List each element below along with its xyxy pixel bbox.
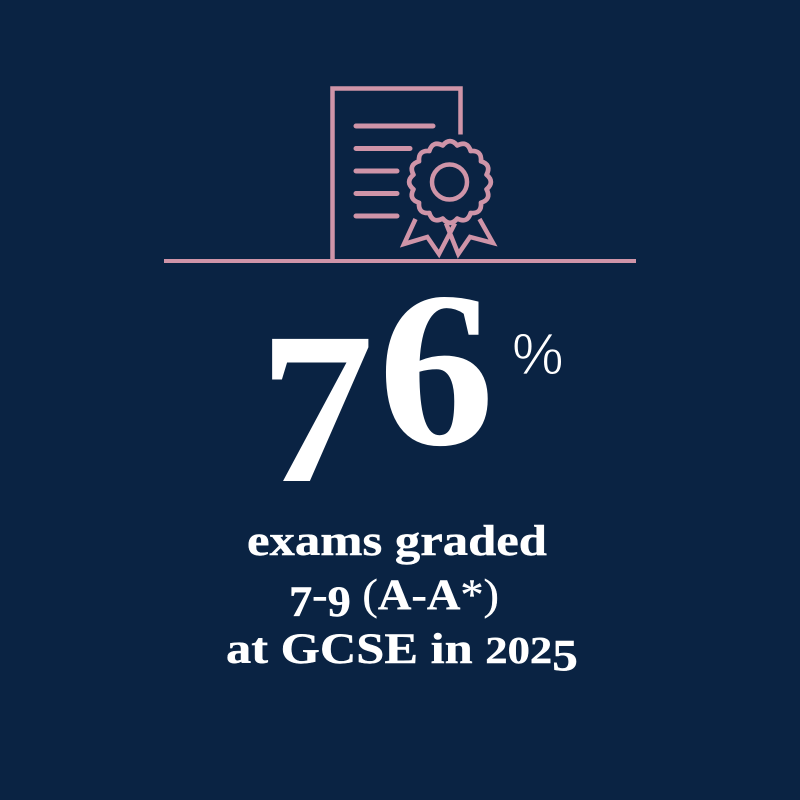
big number: 76 (259, 247, 495, 529)
document text lines (356, 126, 433, 216)
caption line 3: at GCSE in 202 (226, 626, 542, 673)
caption line 2: 9 (328, 579, 351, 626)
rosette seal (409, 141, 491, 223)
icon: certificate with rosette (332, 88, 493, 261)
rosette ribbons (404, 219, 493, 254)
caption line 2: (A-A*) (362, 572, 496, 619)
document outline (332, 88, 460, 261)
digit 6: 6 (378, 247, 495, 493)
caption (226, 518, 578, 680)
percent sign: % (512, 322, 564, 387)
caption line 3: 5 (552, 631, 578, 680)
baseline rule (164, 259, 636, 263)
caption line 2: 7 (289, 579, 312, 626)
caption line 1: exams graded (247, 518, 547, 565)
digit 7: 7 (259, 289, 374, 529)
caption line 2: - (312, 572, 328, 619)
